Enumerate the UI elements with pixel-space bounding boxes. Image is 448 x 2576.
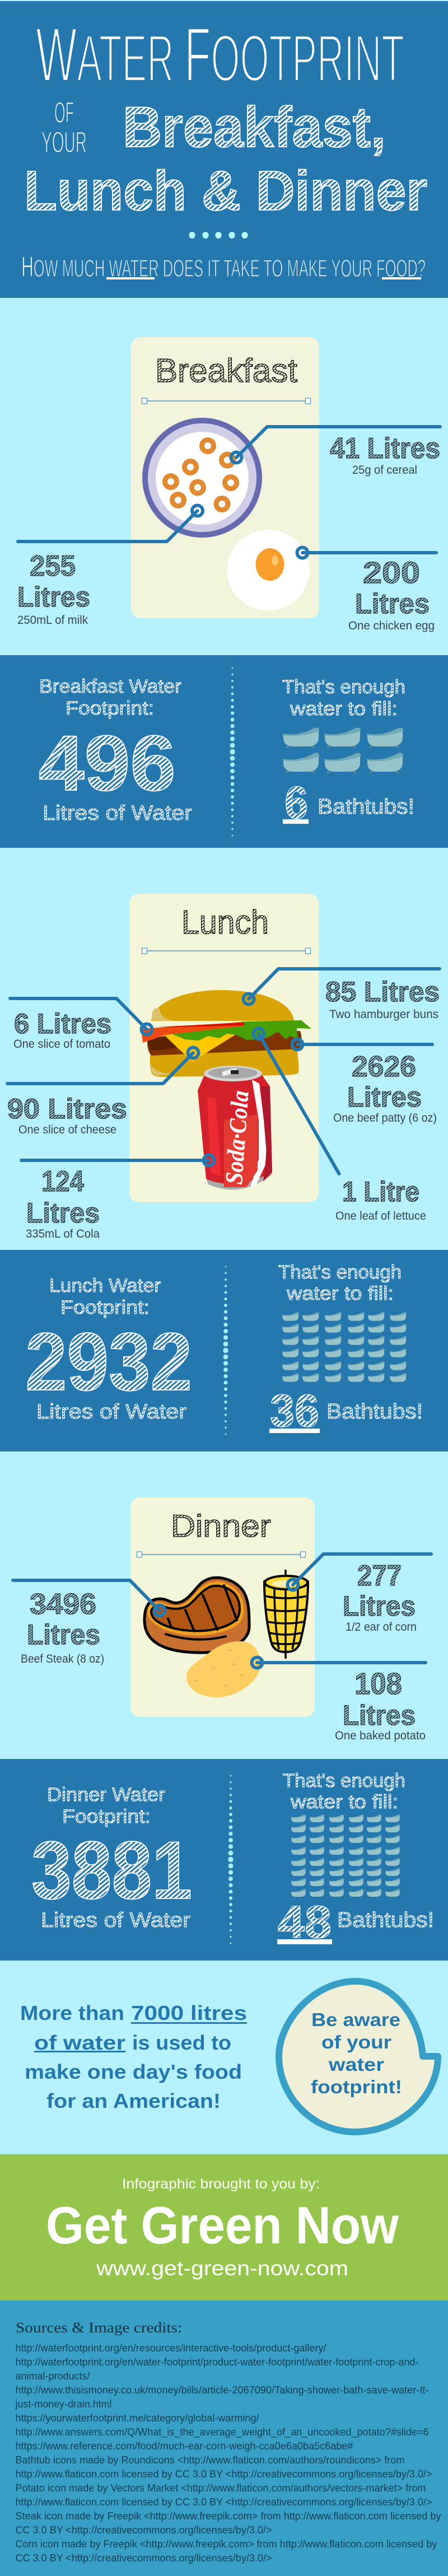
text: 48 bathtubs xyxy=(277,1897,434,1948)
text: litres of water: Litres of Water xyxy=(36,1400,186,1423)
icon: 36 bathtubs xyxy=(282,1312,407,1382)
text block: 7000 litres statement: make one day's food xyxy=(25,2060,242,2083)
callout: 200 litres egg: One chicken egg xyxy=(348,619,435,632)
text block: 7000 litres statement: More than xyxy=(20,2001,124,2024)
dotted divider xyxy=(223,1266,228,1435)
text: lunch water footprint: Lunch Water xyxy=(49,1275,161,1296)
text: of your xyxy=(41,96,87,159)
panel: breakfast xyxy=(131,337,319,618)
text: that's enough water to fill: That's enough xyxy=(278,1262,402,1283)
callout: 85 litres buns: 85 Litres xyxy=(325,976,440,1007)
callout: 124 litres cola xyxy=(21,1155,214,1240)
text: 36 bathtubs: Bathtubs! xyxy=(326,1400,423,1424)
callout: 3496 litres steak: Litres xyxy=(27,1619,100,1650)
text: that's enough water to fill: That's enough xyxy=(283,1770,405,1791)
text: dinner water footprint: Footprint: xyxy=(62,1806,151,1827)
icon: 6 bathtubs xyxy=(282,727,403,774)
callout: 200 litres egg: 200 xyxy=(363,556,420,590)
text block: source list: https://yourwaterfootprint.me/category/global-warming/ xyxy=(16,2412,259,2424)
callout: 277 litres corn: 277 xyxy=(357,1560,402,1592)
callout: 124 litres cola: 335mL of Cola xyxy=(26,1228,100,1240)
icon: cola can: Soda·Cola xyxy=(220,1090,254,1186)
icon: fried egg xyxy=(227,530,309,610)
text: 6 bathtubs xyxy=(283,777,414,828)
panel: lunch footprint summary xyxy=(0,1250,448,1452)
text block: source list: http://www.flaticon.com licensed by CC 3.0 BY <http://creativecommons.org/licenses/by/3.0/> xyxy=(16,2468,432,2480)
text block: source list xyxy=(15,2342,441,2564)
panel: dinner footprint summary xyxy=(0,1759,448,1961)
callout: 41 litres cereal: 41 Litres xyxy=(330,432,440,465)
panel: sources and credits xyxy=(0,2300,448,2576)
text block: source list: https://www.reference.com/food/much-ear-corn-weigh-cca0e6a0ba5c6abe# xyxy=(16,2440,353,2452)
callout: 2626 litres patty: One beef patty (6 oz) xyxy=(333,1112,437,1124)
callout: 1 litre lettuce xyxy=(253,1028,426,1222)
panel: breakfast footprint summary xyxy=(0,655,448,848)
text: of your: YOUR xyxy=(41,126,87,159)
text: litres of water: Litres of Water xyxy=(41,1908,190,1931)
text block: source list: Corn icon made by Freepik <http://www.freepik.com> from http://www.flaticon.com licensed by xyxy=(16,2538,437,2550)
callout: 6 litres tomato: 6 Litres xyxy=(14,1008,111,1039)
title: Lunch & Dinner: Lunch & Dinner xyxy=(24,160,427,222)
text block: source list: Potato icon made by Vectors Market <http://www.flaticon.com/authors/vectors-market> from xyxy=(16,2482,426,2494)
callout: 2626 litres patty: 2626 xyxy=(352,1051,416,1083)
callout: 255 litres milk xyxy=(17,505,203,627)
number: 496: 496 xyxy=(39,719,176,807)
dotted divider xyxy=(228,1775,234,1944)
callout: 277 litres corn: 1/2 ear of corn xyxy=(346,1621,417,1634)
callout: 6 litres tomato xyxy=(10,998,152,1051)
heading: Breakfast: Breakfast xyxy=(155,352,297,389)
icon: 48 bathtubs xyxy=(291,1814,400,1897)
callout: 90 litres cheese xyxy=(7,1047,198,1136)
text block: 7000 litres statement: for an American! xyxy=(46,2089,221,2112)
callout: 3496 litres steak: Beef Steak (8 oz) xyxy=(21,1653,104,1665)
heading: sources: Sources & Image credits: xyxy=(16,2320,182,2336)
text: lunch water footprint: Footprint: xyxy=(60,1297,150,1318)
handle line xyxy=(142,398,310,404)
title: Breakfast,: Breakfast, xyxy=(123,95,386,159)
icon: steak xyxy=(144,1578,249,1653)
panel: dinner xyxy=(130,1497,315,1717)
text: that's enough water to fill: water to fill: xyxy=(290,698,398,720)
callout: 1 litre lettuce: One leaf of lettuce xyxy=(335,1210,426,1222)
handle line xyxy=(137,1552,306,1557)
text block: source list: http://waterfootprint.org/en/water-footprint/product-water-footprint/water-footprint-crop-and- xyxy=(16,2356,419,2368)
callout: 255 litres milk: 255 xyxy=(30,550,76,582)
callout: 200 litres egg: Litres xyxy=(355,588,430,619)
text: breakfast water footprint: Footprint: xyxy=(66,698,154,719)
callout: 277 litres corn xyxy=(288,1554,431,1634)
text: 36 bathtubs: 36 xyxy=(270,1385,319,1436)
text block: source list: Bathtub icons made by Roundicons <http://www.flaticon.com/authors/roundicons> from xyxy=(16,2454,404,2466)
callout: 255 litres milk: Litres xyxy=(17,581,90,613)
text: dinner water footprint: Dinner Water xyxy=(47,1784,165,1805)
text block: source list: CC 3.0 BY <http://creativecommons.org/licenses/by/3.0/> xyxy=(16,2552,272,2564)
number: 3881: 3881 xyxy=(31,1824,192,1916)
text block: source list: CC 3.0 BY <http://creativecommons.org/licenses/by/3.0/> xyxy=(16,2524,272,2536)
callout: 90 litres cheese: 90 Litres xyxy=(7,1093,127,1124)
callout: 124 litres cola: 124 xyxy=(41,1165,84,1198)
text block: source list: just-money-drain.html xyxy=(15,2398,112,2410)
text: that's enough water to fill xyxy=(278,1262,402,1304)
dotted divider xyxy=(230,668,235,836)
header panel xyxy=(0,1,448,298)
text: dinner water footprint xyxy=(47,1784,165,1827)
handle line xyxy=(142,948,310,954)
callout: 3496 litres steak xyxy=(13,1580,165,1665)
dots ornament xyxy=(189,232,248,239)
heading: Dinner: Dinner xyxy=(171,1508,271,1543)
callout: 85 litres buns: Two hamburger buns xyxy=(329,1008,438,1021)
text: infographic brought to you by: Infographic brought to you by: xyxy=(122,2176,320,2192)
callout: 6 litres tomato: One slice of tomato xyxy=(13,1038,110,1051)
brand: Get Green Now: Get Green Now xyxy=(46,2196,399,2255)
callout: 108 litres potato: 108 xyxy=(354,1667,402,1701)
callout: speech bubble: of your xyxy=(321,2032,391,2052)
text: 6 bathtubs: 6 xyxy=(284,777,308,828)
callout: 1 litre lettuce: 1 Litre xyxy=(342,1176,419,1207)
text block: 7000 litres statement xyxy=(20,2001,247,2112)
text block: source list: Steak icon made by Freepik <http://www.freepik.com> from http://www.flaticon.com licensed by xyxy=(16,2510,441,2522)
callout: 108 litres potato xyxy=(252,1658,426,1742)
callout: 108 litres potato: One baked potato xyxy=(335,1729,426,1742)
panel: brought to you by xyxy=(0,2154,448,2300)
callout: 255 litres milk: 250mL of milk xyxy=(17,614,88,627)
text block: source list: http://www.answers.com/Q/What_is_the_average_weight_of_an_uncooked_potato?#slide=6 xyxy=(16,2426,429,2438)
callout: 2626 litres patty xyxy=(292,1039,437,1124)
callout: speech bubble: Be aware xyxy=(311,2009,400,2030)
text: lunch water footprint xyxy=(49,1275,161,1318)
text block: source list: http://waterfootprint.org/en/resources/interactive-tools/product-gallery/ xyxy=(16,2342,326,2354)
callout: speech bubble: footprint! xyxy=(311,2076,402,2097)
callout: speech bubble xyxy=(279,1981,438,2132)
text: that's enough water to fill: That's enough xyxy=(282,676,405,698)
icon: burger xyxy=(141,990,311,1077)
callout: 3496 litres steak: 3496 xyxy=(30,1588,96,1621)
text: that's enough water to fill xyxy=(282,676,405,720)
callout: 2626 litres patty: Litres xyxy=(347,1081,422,1113)
text: 48 bathtubs: 48 xyxy=(278,1897,332,1948)
text: that's enough water to fill xyxy=(283,1770,405,1813)
callout: 108 litres potato: Litres xyxy=(343,1700,416,1731)
text: that's enough water to fill: water to fill: xyxy=(286,1283,394,1304)
callout: 277 litres corn: Litres xyxy=(343,1590,416,1622)
callout: 41 litres cereal xyxy=(231,427,440,477)
heading: Lunch: Lunch xyxy=(181,904,269,941)
text: breakfast water footprint xyxy=(39,676,181,719)
icon: corn xyxy=(264,1570,308,1659)
icon: potato xyxy=(186,1641,260,1697)
text block: source list: http://www.flaticon.com licensed by CC 3.0 BY <http://creativecommons.org/licenses/by/3.0/> xyxy=(16,2496,432,2508)
callout: 124 litres cola: Litres xyxy=(26,1197,100,1229)
callout: speech bubble: water xyxy=(328,2054,384,2075)
text: breakfast water footprint: Breakfast Water xyxy=(39,676,181,697)
url: www.get-green-now.com xyxy=(96,2257,348,2280)
callout: 85 litres buns xyxy=(243,969,440,1021)
text: 6 bathtubs: Bathtubs! xyxy=(318,795,414,819)
text: that's enough water to fill: water to fill: xyxy=(290,1791,398,1813)
text block: source list: animal-products/ xyxy=(16,2370,90,2382)
number: 2932: 2932 xyxy=(25,1316,192,1407)
text: of your: OF xyxy=(54,96,74,129)
icon: cola can xyxy=(198,1066,272,1189)
panel: lunch xyxy=(129,894,319,1202)
text block: 7000 litres statement: 7000 litres xyxy=(131,2001,247,2024)
text block: 7000 litres statement: is used to xyxy=(132,2031,231,2054)
text block: 7000 litres statement: of water xyxy=(34,2031,125,2054)
callout: 41 litres cereal: 25g of cereal xyxy=(352,464,417,477)
text block: source list: http://www.thisismoney.co.uk/money/bills/article-2067090/Taking-shower-bath-save-water-It- xyxy=(16,2384,429,2396)
callout: 200 litres egg xyxy=(297,548,436,632)
text: litres of water: Litres of Water xyxy=(43,801,192,824)
callout: 90 litres cheese: One slice of cheese xyxy=(18,1123,116,1136)
text: 36 bathtubs xyxy=(269,1385,423,1436)
icon: cereal bowl xyxy=(142,418,262,538)
text: 48 bathtubs: Bathtubs! xyxy=(337,1908,434,1932)
